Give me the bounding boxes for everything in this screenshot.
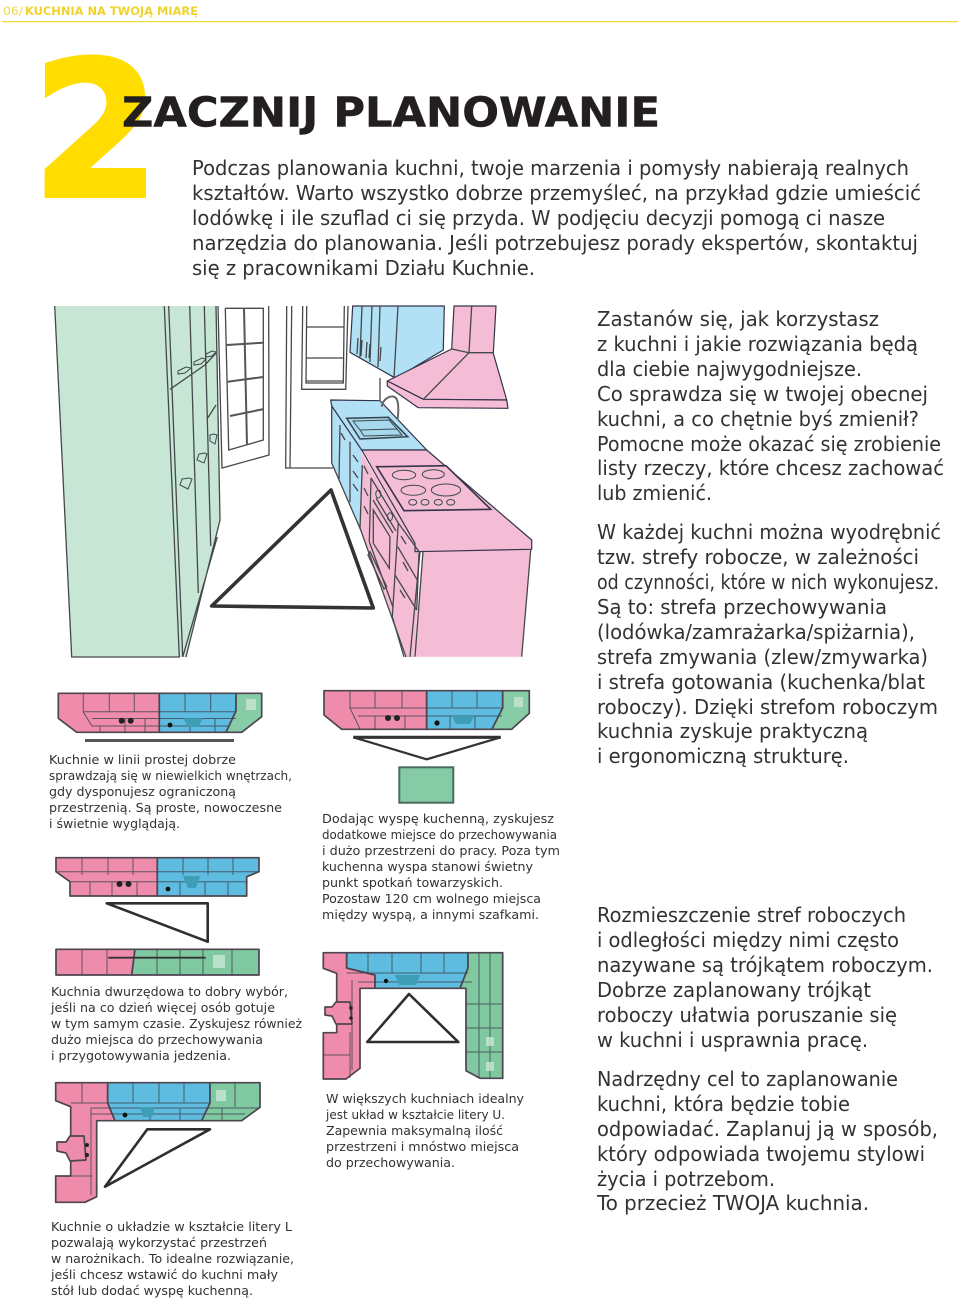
caption: double row kitchen: dużo miejsca do przechowywania bbox=[51, 1032, 263, 1047]
right column text: main goal: Nadrzędny cel to zaplanowanie bbox=[597, 1067, 898, 1091]
caption: single line kitchen: Kuchnie w linii prostej dobrze bbox=[49, 752, 236, 767]
title: ZACZNIJ PLANOWANIE bbox=[122, 88, 660, 136]
right column text: how you use the kitchen: Co sprawdza się w twojej obecnej bbox=[597, 382, 928, 406]
caption: single line kitchen: gdy dysponujesz ograniczoną bbox=[49, 784, 236, 799]
caption: L-shaped kitchen: pozwalają wykorzystać przestrzeń bbox=[51, 1235, 267, 1250]
right column text: how you use the kitchen: Pomocne może okazać się zrobienie bbox=[597, 432, 941, 456]
caption: L-shaped kitchen: w narożnikach. To idealne rozwiązanie, bbox=[51, 1251, 294, 1266]
blue wall cabinets bbox=[350, 306, 444, 378]
pink cooker hood bbox=[387, 306, 508, 408]
worktop and base units: blue sink zone bbox=[331, 396, 427, 530]
intro paragraph: się z pracownikami Działu Kuchnie. bbox=[192, 256, 535, 280]
page header bbox=[2, 4, 958, 22]
right column text: work zones: strefa zmywania (zlew/zmywarka) bbox=[597, 645, 928, 669]
right column text: main goal: odpowiadać. Zaplanuj ją w sposób, bbox=[597, 1117, 938, 1141]
caption: double row kitchen: i przygotowywania jedzenia. bbox=[51, 1048, 231, 1063]
right column text: work zones: roboczy). Dzięki strefom roboczym bbox=[597, 695, 938, 719]
right column text: work zones bbox=[597, 520, 941, 768]
intro paragraph bbox=[192, 156, 921, 280]
floor plan: L-shaped kitchen bbox=[56, 1083, 260, 1202]
work triangle bbox=[212, 490, 373, 608]
caption: single line kitchen bbox=[49, 752, 292, 831]
intro paragraph: Podczas planowania kuchni, twoje marzenia i pomysły nabierają realnych bbox=[192, 156, 909, 180]
right column text: work triangle: nazywane są trójkątem roboczym. bbox=[597, 953, 933, 977]
caption: L-shaped kitchen: Kuchnie o układzie w kształcie litery L bbox=[51, 1219, 292, 1234]
right column text: how you use the kitchen: dla ciebie najwygodniejsze. bbox=[597, 357, 862, 381]
caption: kitchen with island: kuchenna wyspa stanowi świetny bbox=[322, 859, 533, 874]
right column text: work triangle: w kuchni i usprawnia pracę. bbox=[597, 1028, 868, 1052]
intro paragraph: narzędzia do planowania. Jeśli potrzebujesz porady ekspertów, skontaktuj bbox=[192, 231, 918, 255]
page header: KUCHNIA NA TWOJĄ MIARĘ bbox=[25, 4, 198, 18]
caption: U-shaped kitchen: Zapewnia maksymalną ilość bbox=[326, 1123, 503, 1138]
caption: kitchen with island: dodatkowe miejsce do przechowywania bbox=[322, 827, 557, 842]
caption: U-shaped kitchen: jest układ w kształcie litery U. bbox=[325, 1107, 505, 1122]
caption: single line kitchen: przestrzenią. Są proste, nowoczesne bbox=[49, 800, 282, 815]
floor plan: kitchen with island bbox=[324, 691, 529, 803]
caption: double row kitchen: Kuchnia dwurzędowa to dobry wybór, bbox=[51, 984, 288, 999]
intro paragraph: kształtów. Warto wszystko dobrze przemyśleć, na przykład gdzie umieścić bbox=[192, 181, 921, 205]
door with window bbox=[218, 306, 269, 468]
caption: kitchen with island bbox=[322, 811, 560, 922]
page header: 06/ bbox=[3, 4, 23, 18]
right column text: main goal: To przecież TWOJA kuchnia. bbox=[596, 1191, 869, 1215]
big yellow number 2: 2 bbox=[32, 22, 160, 241]
caption: U-shaped kitchen: W większych kuchniach idealny bbox=[326, 1091, 524, 1106]
caption: L-shaped kitchen: stół lub dodać wyspę kuchenną. bbox=[51, 1283, 253, 1298]
right column text: how you use the kitchen: kuchni, a co chętnie byś zmienił? bbox=[597, 407, 919, 431]
caption: kitchen with island: między wyspą, a innymi szafkami. bbox=[322, 907, 539, 922]
right column text: how you use the kitchen: Zastanów się, jak korzystasz bbox=[597, 307, 879, 331]
right column text: work zones: i strefa gotowania (kuchenka/blat bbox=[597, 670, 925, 694]
intro paragraph: lodówkę i ile szuflad ci się przyda. W podjęciu decyzji pomogą ci nasze bbox=[192, 206, 885, 230]
right column text: how you use the kitchen: listy rzeczy, które chcesz zachować bbox=[597, 456, 944, 480]
worktop and base units: pink cooking zone bbox=[360, 450, 532, 657]
caption: kitchen with island: punkt spotkań towarzyskich. bbox=[322, 875, 503, 890]
right column text: work triangle: Rozmieszczenie stref roboczych bbox=[597, 903, 906, 927]
right column text: main goal: który odpowiada twojemu stylowi bbox=[597, 1142, 925, 1166]
caption: L-shaped kitchen: jeśli chcesz wstawić do kuchni mały bbox=[50, 1267, 278, 1282]
caption: U-shaped kitchen: przestrzeni i mnóstwo miejsca bbox=[326, 1139, 519, 1154]
right column text: how you use the kitchen bbox=[597, 307, 944, 505]
right column text: work zones: kuchnia zyskuje praktyczną bbox=[597, 719, 868, 743]
caption: single line kitchen: sprawdzają się w niewielkich wnętrzach, bbox=[49, 768, 292, 783]
caption: kitchen with island: Dodając wyspę kuchenną, zyskujesz bbox=[322, 811, 554, 826]
right column text: work zones: tzw. strefy robocze, w zależności bbox=[597, 545, 919, 569]
right column text: work triangle bbox=[597, 903, 933, 1052]
floor plan: U-shaped kitchen bbox=[323, 953, 503, 1079]
right column text: main goal: kuchni, która będzie tobie bbox=[597, 1092, 850, 1116]
right column text: work triangle: Dobrze zaplanowany trójkąt bbox=[597, 978, 871, 1002]
right column text: how you use the kitchen: z kuchni i jakie rozwiązania będą bbox=[597, 332, 918, 356]
far wall and rear window bbox=[286, 306, 380, 468]
caption: double row kitchen: jeśli na co dzień więcej osób gotuje bbox=[50, 1000, 275, 1015]
right column text: work zones: W każdej kuchni można wyodrębnić bbox=[597, 520, 941, 544]
caption: U-shaped kitchen: do przechowywania. bbox=[326, 1155, 455, 1170]
caption: double row kitchen bbox=[50, 984, 302, 1063]
caption: U-shaped kitchen bbox=[325, 1091, 524, 1170]
caption: kitchen with island: i dużo przestrzeni do pracy. Poza tym bbox=[322, 843, 560, 858]
right column text: work triangle: roboczy ułatwia poruszanie się bbox=[597, 1003, 897, 1027]
cooktop with four burners bbox=[377, 466, 491, 511]
tall green storage wall bbox=[55, 306, 220, 657]
right column text: how you use the kitchen: lub zmienić. bbox=[597, 481, 712, 505]
illustration: kitchen in perspective with work triangle bbox=[55, 306, 532, 657]
floor plan: single line kitchen bbox=[58, 693, 262, 742]
right column text: work zones: i ergonomiczną strukturę. bbox=[597, 744, 849, 768]
floor plan: double row kitchen bbox=[56, 858, 259, 975]
caption: L-shaped kitchen bbox=[50, 1219, 294, 1298]
right column text: work triangle: i odległości między nimi często bbox=[597, 928, 899, 952]
right column text: main goal bbox=[596, 1067, 938, 1215]
caption: double row kitchen: w tym samym czasie. Zyskujesz również bbox=[51, 1016, 302, 1031]
caption: kitchen with island: Pozostaw 120 cm wolnego miejsca bbox=[322, 891, 541, 906]
caption: single line kitchen: i świetnie wyglądają. bbox=[49, 816, 180, 831]
right column text: work zones: Są to: strefa przechowywania bbox=[597, 595, 887, 619]
right column text: work zones: (lodówka/zamrażarka/spiżarnia), bbox=[597, 620, 915, 644]
right column text: main goal: życia i potrzebom. bbox=[597, 1167, 775, 1191]
